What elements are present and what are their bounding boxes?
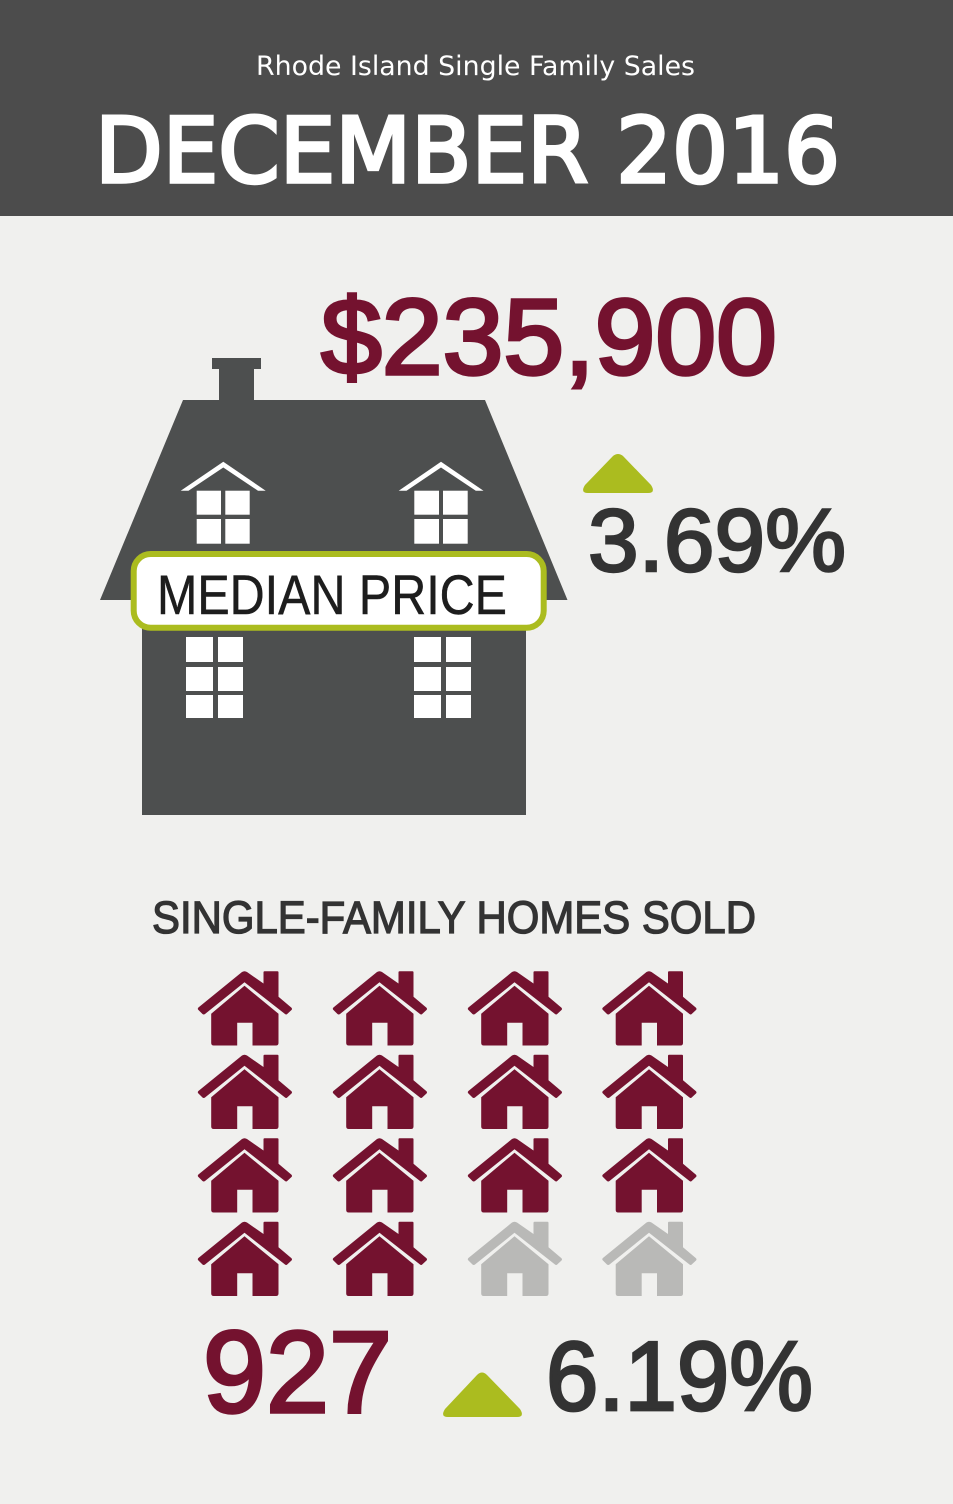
median price label: MEDIAN PRICE (157, 563, 507, 626)
illustration: large house (100, 358, 568, 815)
icon: price up arrow (583, 454, 653, 493)
lower left window (186, 637, 243, 718)
homes sold heading: SINGLE-FAMILY HOMES SOLD (152, 892, 756, 943)
right dormer (399, 462, 484, 544)
icon: sales up arrow (443, 1372, 522, 1417)
header banner (0, 0, 953, 216)
title: DECEMBER 2016 (95, 99, 840, 204)
median price change: 3.69% (588, 490, 846, 590)
median price value: $235,900 (321, 276, 777, 397)
left dormer (181, 462, 266, 544)
homes sold change: 6.19% (546, 1321, 813, 1431)
subtitle: Rhode Island Single Family Sales (256, 51, 695, 82)
row 1 (198, 971, 697, 1046)
house silhouette (100, 358, 568, 815)
row 4 filled (198, 1222, 427, 1296)
row 2 (198, 1055, 697, 1129)
homes sold count: 927 (203, 1307, 392, 1437)
row 4 unfilled (468, 1222, 696, 1296)
lower right window (414, 637, 471, 718)
pictogram: homes sold (198, 971, 697, 1296)
row 3 (198, 1138, 697, 1212)
